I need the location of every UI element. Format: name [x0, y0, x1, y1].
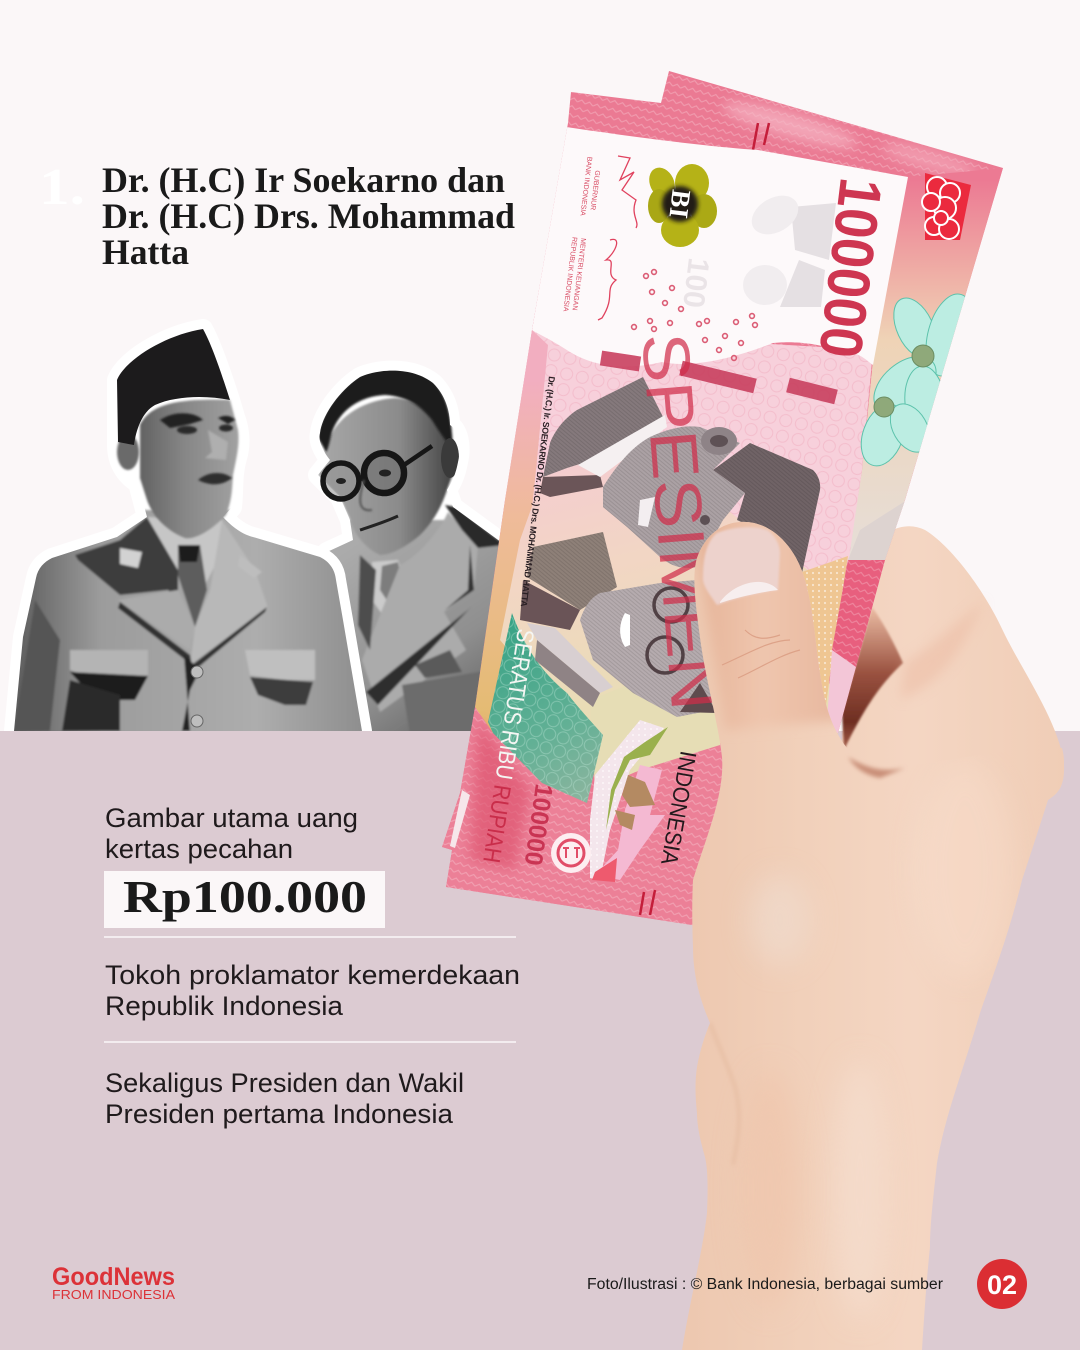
signatory captions: REPUBLIK INDONESIA [561, 236, 578, 312]
signatory captions [561, 156, 600, 312]
text block: denomination [104, 803, 385, 928]
pale green field [594, 706, 720, 780]
background: upper panel [0, 0, 1080, 731]
signatory captions: MENTERI KEUANGAN [571, 238, 586, 311]
photo credit: Foto/Ilustrasi : © Bank Indonesia, berbagai sumber [587, 1276, 943, 1293]
title [102, 160, 515, 272]
thumb creases [722, 630, 800, 678]
INDONESIA label: INDONESIA [656, 749, 702, 867]
green band [488, 613, 603, 803]
denomination label [104, 871, 385, 928]
signatures [598, 156, 637, 320]
Bank Indonesia flower logo: BI [663, 188, 697, 220]
hand: fingers behind the banknote [840, 526, 1064, 860]
Hatta engraving on note [520, 532, 717, 717]
signatory captions: BANK INDONESIA [578, 156, 593, 216]
portrait: Soekarno [10, 329, 370, 735]
Bank Indonesia flower logo [644, 163, 717, 247]
page number badge [977, 1259, 1027, 1309]
banknote Rp100.000 [442, 71, 1003, 925]
title: Hatta [102, 232, 189, 272]
watermark portraits: 100 [676, 256, 715, 310]
main pink field [505, 330, 872, 570]
logo: GoodNews from Indonesia: GoodNews [52, 1263, 175, 1291]
page number badge: 02 [987, 1270, 1017, 1300]
text block: president and vice president: Presiden pertama Indonesia [105, 1099, 454, 1129]
logo: GoodNews from Indonesia [52, 1263, 176, 1302]
number 1: 1. [39, 159, 85, 216]
teal orchid flowers [860, 294, 966, 466]
round seal [551, 833, 591, 873]
portrait background [500, 461, 838, 734]
portrait: Mohammad Hatta [318, 370, 499, 731]
small value numeral: 100000 [519, 782, 558, 867]
Soekarno engraving on note [540, 377, 820, 573]
perforation dots [632, 270, 757, 360]
text block: denomination: kertas pecahan [105, 834, 293, 864]
hand: finger crease [848, 757, 905, 778]
signatory captions: GUBERNUR [589, 170, 600, 210]
portrait caption: Dr. (H.C.) Ir. SOEKARNO Dr. (H.C.) Drs. MOHAMMAD HATTA [519, 376, 557, 608]
denomination label: Rp100.000 [123, 871, 367, 922]
text block: proclamators: Tokoh proklamator kemerdekaan [105, 960, 520, 990]
text block: denomination: Gambar utama uang [105, 803, 358, 833]
logo: GoodNews from Indonesia: FROM INDONESIA [52, 1288, 176, 1302]
text block: proclamators [105, 960, 520, 1021]
note base and flap [442, 71, 1003, 925]
SPESIMEN overprint: SPESIMEN [628, 330, 732, 713]
thumbnail [703, 527, 780, 605]
text block: proclamators: Republik Indonesia [105, 991, 344, 1021]
title: Dr. (H.C) Ir Soekarno dan [102, 160, 505, 200]
white panel [532, 127, 908, 367]
map of Indonesia [590, 720, 668, 882]
text block: president and vice president: Sekaligus Presiden dan Wakil [105, 1068, 464, 1098]
left edge pattern [475, 330, 548, 740]
watermark portraits [684, 196, 836, 307]
background: lower panel [0, 731, 1080, 1350]
lower red band [442, 707, 722, 924]
title: Dr. (H.C) Drs. Mohammad [102, 196, 515, 236]
hand: shadow between fingers [842, 607, 903, 750]
red orchid emblem [922, 173, 971, 240]
text block: president and vice president [105, 1068, 464, 1129]
hand: knuckle shading [900, 600, 985, 700]
serial 100000: 100000 [806, 175, 895, 361]
value in words: SERATUS RIBU RUPIAH [477, 627, 539, 865]
hand: thumb and palm over the banknote [680, 510, 1080, 1350]
security thread [601, 358, 836, 397]
right strip [848, 168, 1003, 560]
patches right of thumb [826, 498, 910, 733]
